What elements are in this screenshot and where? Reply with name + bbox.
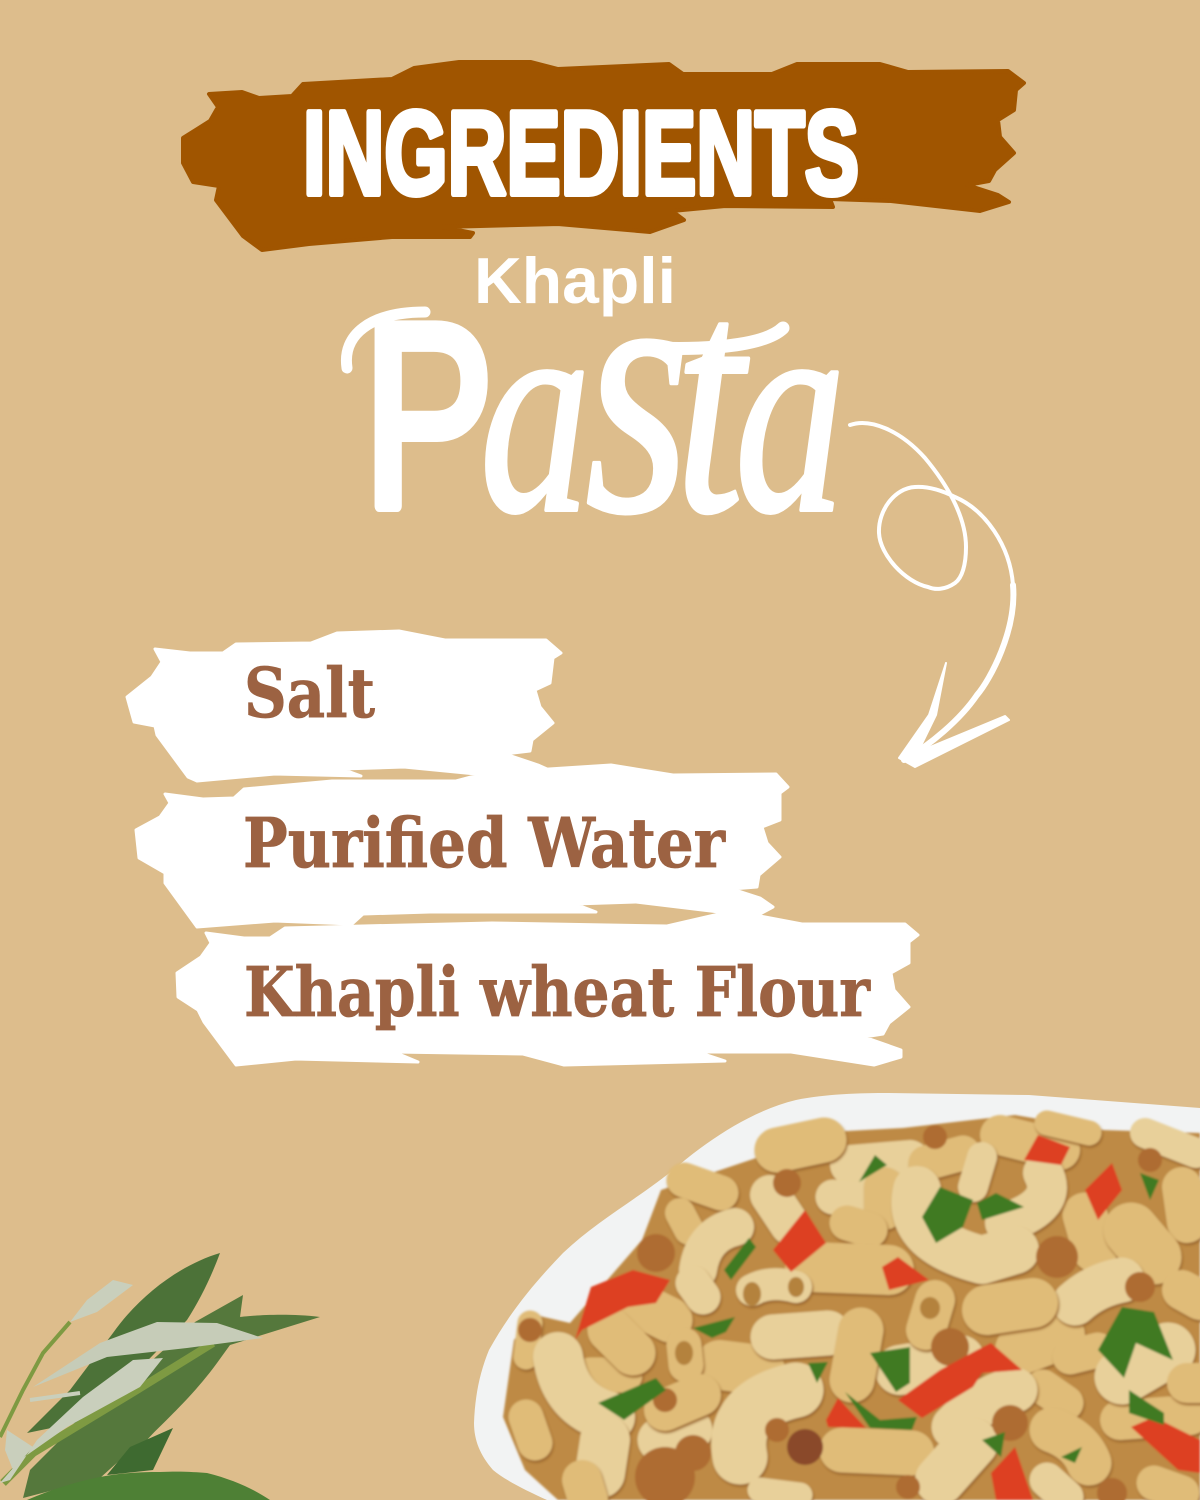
sauce base bbox=[503, 1115, 1200, 1500]
ingredient: Salt bbox=[127, 631, 561, 781]
script title: Pasta: a bbox=[735, 249, 846, 574]
script title: Pasta: P bbox=[363, 270, 494, 561]
ingredient: Salt: Salt bbox=[244, 654, 376, 734]
tube openings bbox=[675, 1277, 940, 1365]
ingredient: Purified Water bbox=[136, 765, 788, 927]
ingredient: Khapli wheat Flour: Khapli wheat Flour bbox=[244, 953, 871, 1033]
macaroni pieces bbox=[526, 1123, 1200, 1500]
script title: Pasta: a bbox=[480, 249, 591, 574]
meat crumbles bbox=[518, 1125, 1162, 1500]
script title: Pasta: s bbox=[585, 189, 690, 588]
parsley garnish bbox=[598, 1155, 1173, 1463]
olive branch leaves bbox=[0, 1253, 320, 1500]
subtitle: Khapli: Khapli bbox=[474, 244, 676, 317]
ingredient: Khapli wheat Flour bbox=[177, 914, 918, 1065]
title banner: brown brush stroke with INGREDIENTS: INGREDIENTS bbox=[303, 87, 859, 220]
pasta dish bbox=[503, 1115, 1200, 1500]
plate bbox=[474, 1093, 1200, 1500]
script title: Pasta: t bbox=[675, 217, 752, 582]
title banner: brown brush stroke with INGREDIENTS bbox=[183, 62, 1024, 250]
tomato pieces bbox=[575, 1135, 1200, 1500]
arrow: looping hand-drawn arrow bbox=[850, 423, 1013, 767]
ingredient: Purified Water: Purified Water bbox=[243, 804, 726, 884]
script title: Pasta bbox=[346, 189, 846, 588]
